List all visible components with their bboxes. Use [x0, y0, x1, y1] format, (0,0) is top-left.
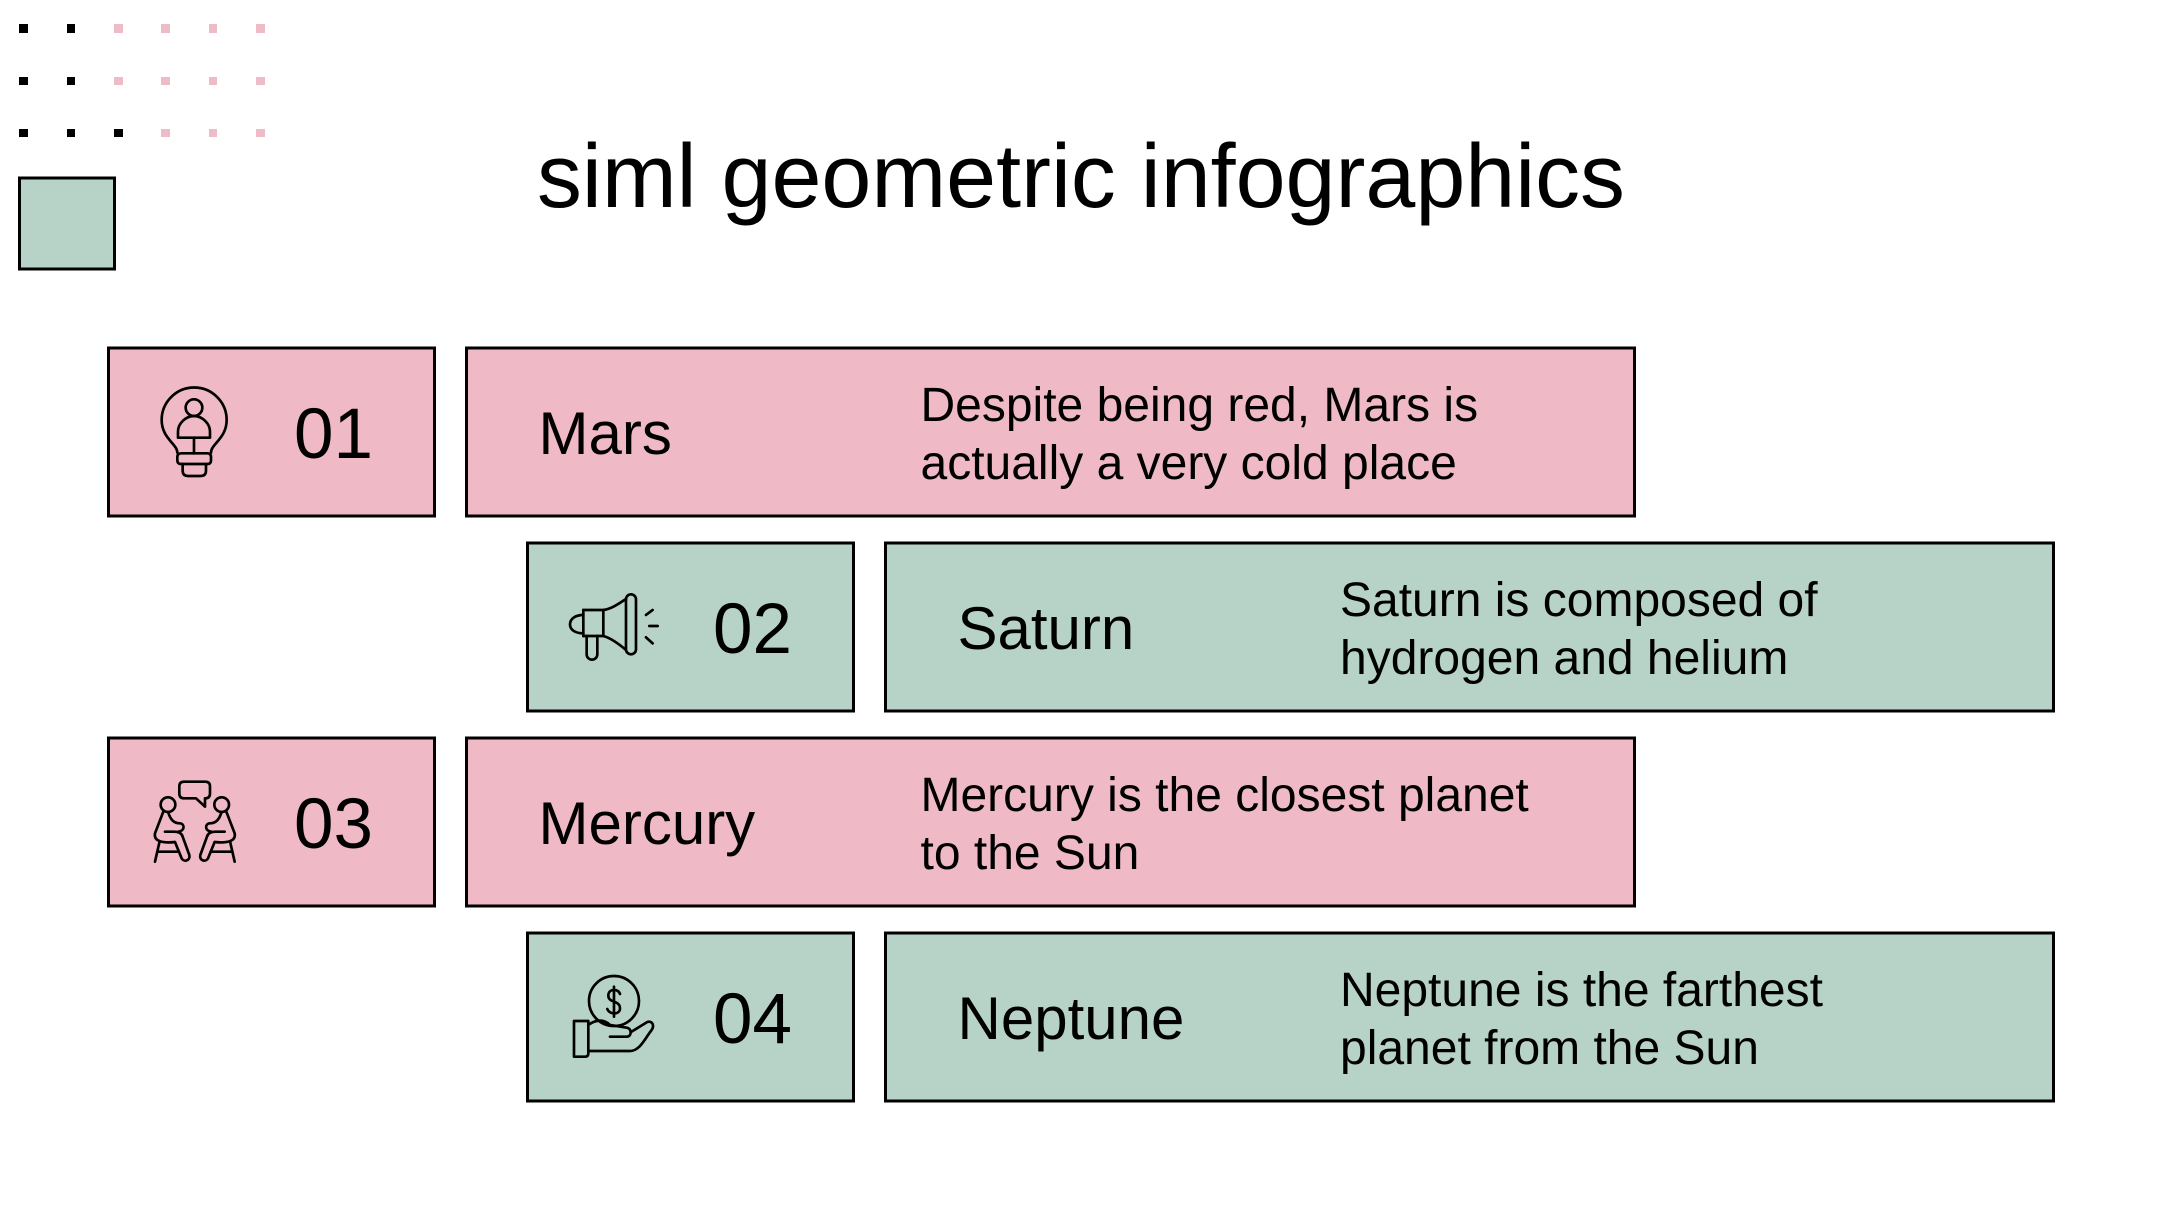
panel: Neptune: [886, 933, 2054, 1101]
number box 04: [528, 933, 854, 1101]
dot grid decoration: [19, 24, 265, 137]
number box 02: [528, 543, 854, 711]
panel: Mercury: [466, 738, 1634, 906]
description: Saturn: hydrogen and helium: [1340, 632, 1788, 685]
decorative green square: [20, 178, 114, 269]
number box 03: [108, 738, 434, 906]
icon: two people talking: [155, 782, 235, 862]
row 03: Mercury: [108, 738, 1634, 906]
description: Neptune: planet from the Sun: [1340, 1022, 1759, 1075]
row 02: Saturn: [528, 543, 2054, 711]
description: Mercury: to the Sun: [920, 827, 1139, 880]
panel: Saturn: [886, 543, 2054, 711]
description: Mars: Despite being red, Mars is: [920, 379, 1478, 432]
description: Mars: actually a very cold place: [920, 437, 1457, 490]
icon: hand holding coin: [574, 976, 653, 1057]
number box 01: [108, 348, 434, 516]
description: Saturn: Saturn is composed of: [1340, 574, 1818, 627]
number 02: 02: [713, 590, 792, 669]
number 03: 03: [294, 785, 373, 864]
panel: Mars: [466, 348, 1634, 516]
icon: lightbulb with person: [162, 387, 227, 476]
description: Mercury: Mercury is the closest planet: [920, 769, 1529, 822]
number 04: 04: [713, 980, 792, 1059]
label: Neptune: Neptune: [958, 985, 1184, 1052]
description: Neptune: Neptune is the farthest: [1340, 964, 1823, 1017]
label: Mars: Mars: [538, 400, 672, 467]
row 04: Neptune: [528, 933, 2054, 1101]
title: siml geometric infographics: [537, 127, 1625, 227]
row 01: Mars: [108, 348, 1634, 516]
label: Mercury: Mercury: [538, 790, 755, 857]
icon: megaphone: [570, 594, 658, 660]
label: Saturn: Saturn: [958, 595, 1134, 662]
number 01: 01: [294, 395, 373, 474]
